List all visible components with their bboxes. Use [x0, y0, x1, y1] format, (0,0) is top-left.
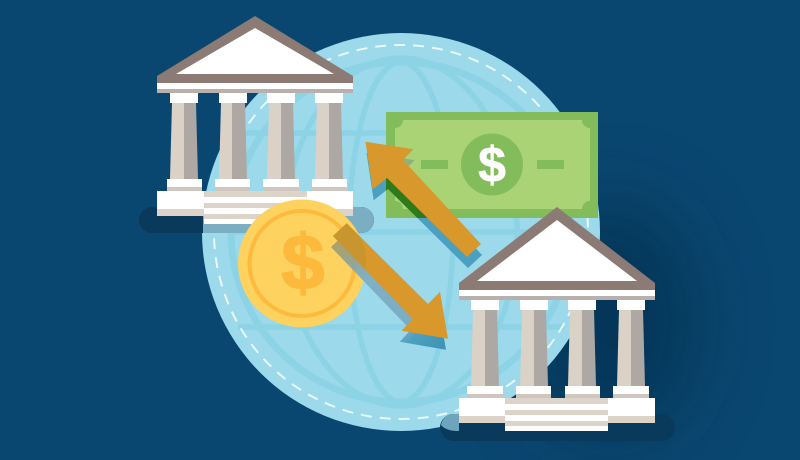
column 3	[263, 93, 299, 191]
column 1	[167, 93, 202, 191]
roof	[157, 16, 353, 83]
soft dark shadow behind globe	[525, 200, 695, 440]
arrow shadow	[331, 234, 446, 350]
arrow body	[333, 223, 448, 339]
arrow to lower bank	[331, 223, 448, 350]
banknote	[386, 112, 598, 218]
arrow tail over coin	[333, 223, 366, 270]
upper bank	[157, 16, 353, 224]
entablature	[459, 290, 655, 300]
dashed orbit ring	[214, 45, 588, 419]
note medallion	[461, 134, 523, 196]
lower bank	[459, 207, 655, 431]
steps	[204, 191, 307, 224]
coin ring	[250, 211, 354, 316]
note dollar sign: $	[478, 137, 506, 193]
arrow to upper bank	[366, 142, 482, 268]
column 2	[215, 93, 250, 191]
column 4	[312, 93, 347, 191]
plinths	[459, 398, 655, 423]
illustration: banks exchanging money across a globe	[139, 16, 709, 448]
note dashes	[421, 160, 564, 169]
column 1	[467, 300, 503, 398]
globe	[202, 33, 600, 431]
globe grid lines	[228, 58, 574, 406]
shadow: upper bank	[139, 207, 374, 233]
roof	[459, 207, 655, 290]
shadow: bank 2	[440, 414, 675, 441]
coin dollar sign: $	[281, 218, 325, 306]
column 3	[565, 300, 600, 398]
gold coin	[238, 200, 366, 328]
column 4	[613, 300, 649, 398]
arrow shadow	[366, 153, 482, 268]
arrow body	[366, 142, 481, 257]
note inner panel	[395, 120, 590, 209]
entablature	[157, 83, 353, 93]
plinths	[157, 191, 353, 216]
column 2	[516, 300, 551, 398]
steps	[505, 398, 608, 431]
